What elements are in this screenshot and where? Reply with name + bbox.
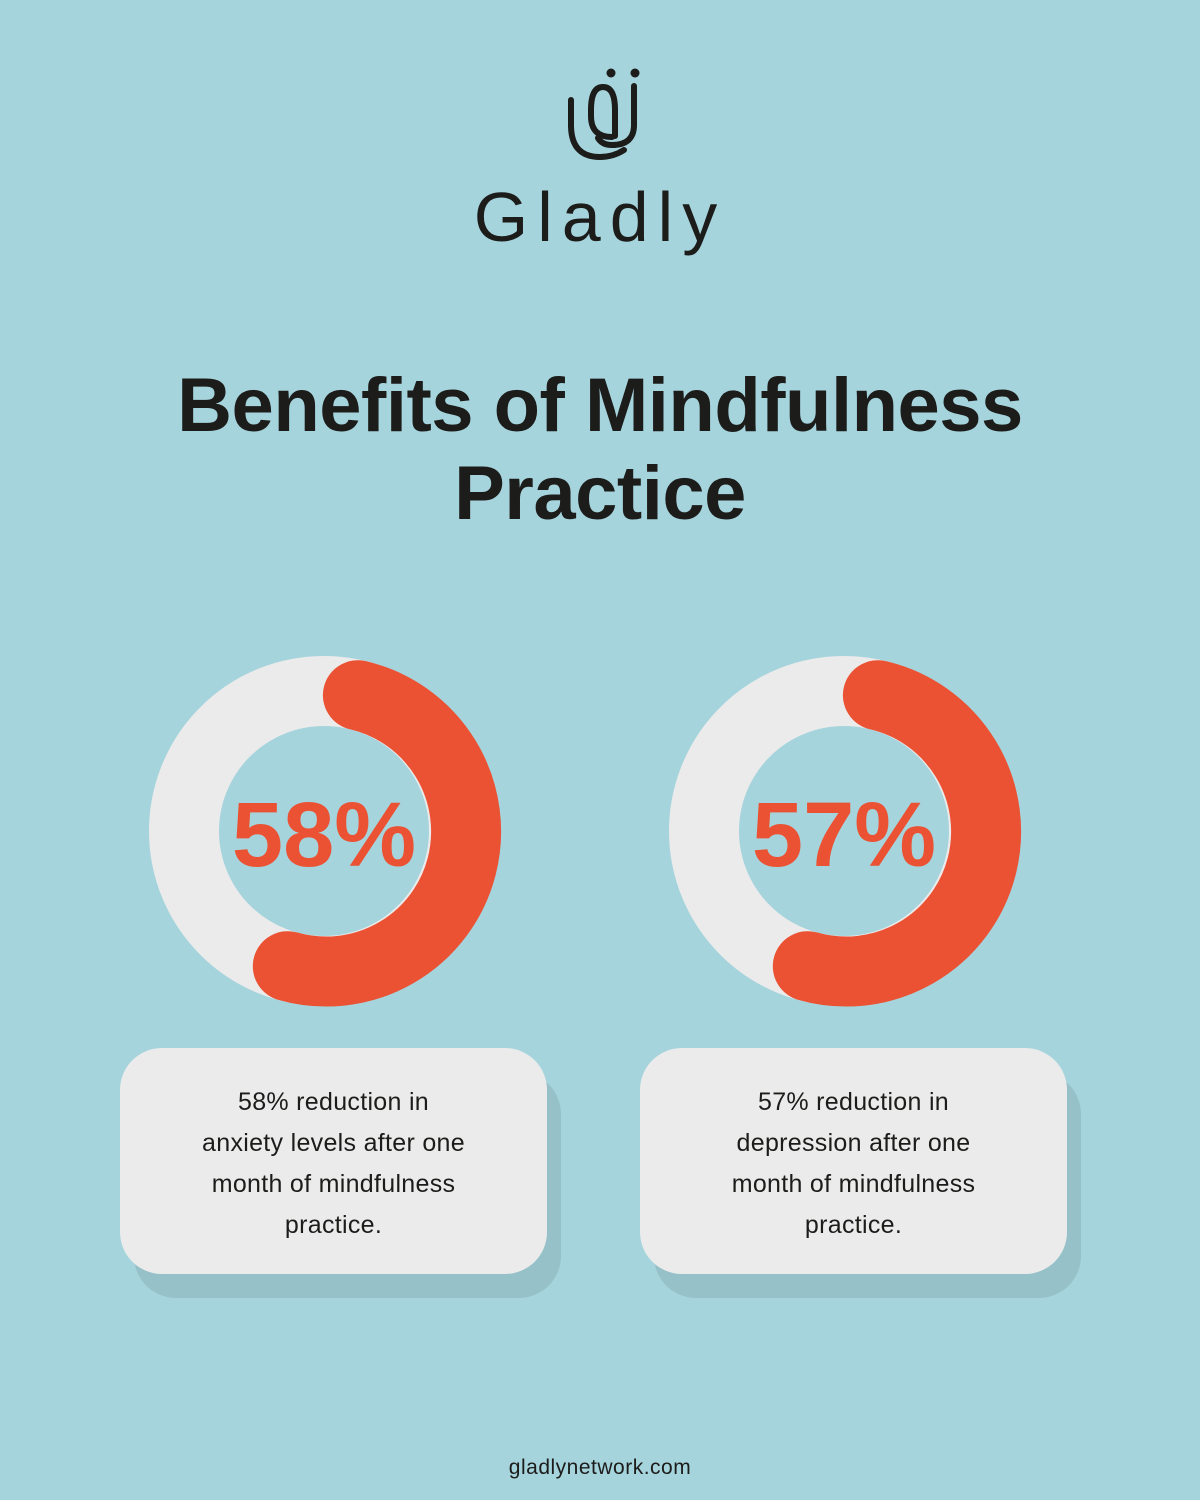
donut chart 58%	[149, 656, 502, 1006]
title	[177, 363, 1023, 536]
title: Benefits of Mindfulness	[177, 363, 1023, 448]
card: depression: practice.	[805, 1211, 902, 1239]
brand name: Gladly	[474, 178, 726, 256]
donut chart 58%: 58%	[232, 784, 416, 886]
card: depression: month of mindfulness	[732, 1170, 975, 1198]
card: anxiety: practice.	[285, 1211, 382, 1239]
footer url: gladlynetwork.com	[509, 1456, 691, 1479]
donut chart 57%: 57%	[752, 784, 936, 886]
card: anxiety	[120, 1048, 547, 1274]
donut chart 57%	[669, 656, 1022, 1006]
card: depression: 57% reduction in	[758, 1088, 949, 1116]
card: anxiety: anxiety levels after one	[202, 1129, 465, 1157]
title: Practice	[454, 451, 746, 536]
logo icon	[568, 68, 640, 160]
card: depression	[640, 1048, 1067, 1274]
card: anxiety: month of mindfulness	[212, 1170, 455, 1198]
card: depression: depression after one	[737, 1129, 970, 1157]
card: anxiety: 58% reduction in	[238, 1088, 429, 1116]
